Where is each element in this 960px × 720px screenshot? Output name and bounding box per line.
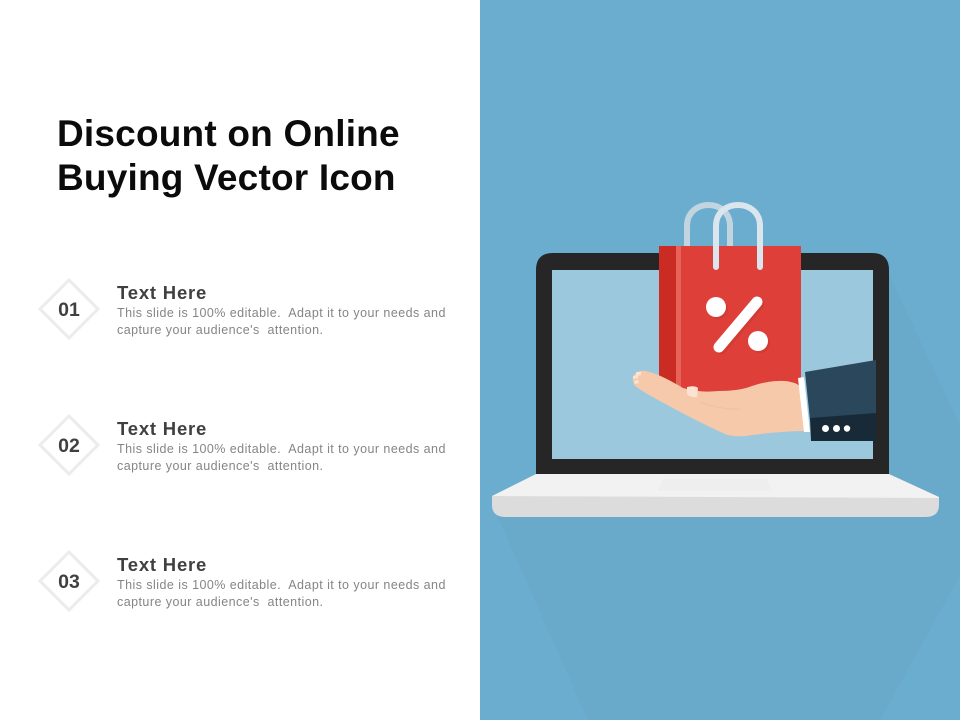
long shadow of laptop <box>497 275 960 720</box>
icon: laptop <box>492 253 939 517</box>
item text 02 <box>117 442 446 473</box>
item heading 03: Text Here <box>117 554 207 575</box>
icon: hand holding bag <box>633 360 876 441</box>
item text 03 <box>117 578 446 609</box>
title: Discount on Online <box>57 113 400 154</box>
laptop screen <box>552 270 873 459</box>
percent symbol <box>706 297 768 351</box>
item text 03: capture your audience's attention. <box>117 595 323 609</box>
sleeve cuff <box>810 413 876 441</box>
back handle <box>687 205 730 246</box>
bag fold highlight <box>676 246 681 396</box>
item text 02: This slide is 100% editable. Adapt it to your needs and <box>117 442 446 456</box>
number 03: 03 <box>58 571 80 593</box>
finger nails <box>633 372 641 384</box>
front handle <box>716 205 760 267</box>
icon: shopping bag with percent <box>659 205 801 396</box>
hand palm <box>633 371 806 436</box>
diamond badge 02 <box>38 414 100 476</box>
item text 01 <box>117 306 446 337</box>
title: Buying Vector Icon <box>57 157 396 198</box>
cuff buttons <box>822 425 850 432</box>
diamond badge 03 <box>38 550 100 612</box>
shirt cuff <box>798 377 810 432</box>
item heading 02: Text Here <box>117 418 207 439</box>
trackpad <box>658 479 772 491</box>
percent symbol shadow <box>708 299 770 353</box>
item heading 01: Text Here <box>117 282 207 303</box>
thumb nail <box>687 386 698 397</box>
number 02: 02 <box>58 435 80 457</box>
item text 01: This slide is 100% editable. Adapt it to your needs and <box>117 306 446 320</box>
list item 01 <box>38 278 446 340</box>
list item 02 <box>38 414 446 476</box>
laptop base front <box>492 496 939 517</box>
bag side panel <box>659 246 676 396</box>
item text 02: capture your audience's attention. <box>117 459 323 473</box>
bag body <box>659 246 801 396</box>
laptop base top <box>492 474 939 500</box>
title <box>57 113 400 198</box>
number 01: 01 <box>58 299 80 321</box>
item text 03: This slide is 100% editable. Adapt it to your needs and <box>117 578 446 592</box>
laptop bezel <box>536 253 889 474</box>
diamond badge 01 <box>38 278 100 340</box>
panel: blue illustration background <box>480 0 960 720</box>
palm crease <box>700 402 741 409</box>
item text 01: capture your audience's attention. <box>117 323 323 337</box>
jacket sleeve <box>805 360 876 420</box>
list item 03 <box>38 550 446 612</box>
